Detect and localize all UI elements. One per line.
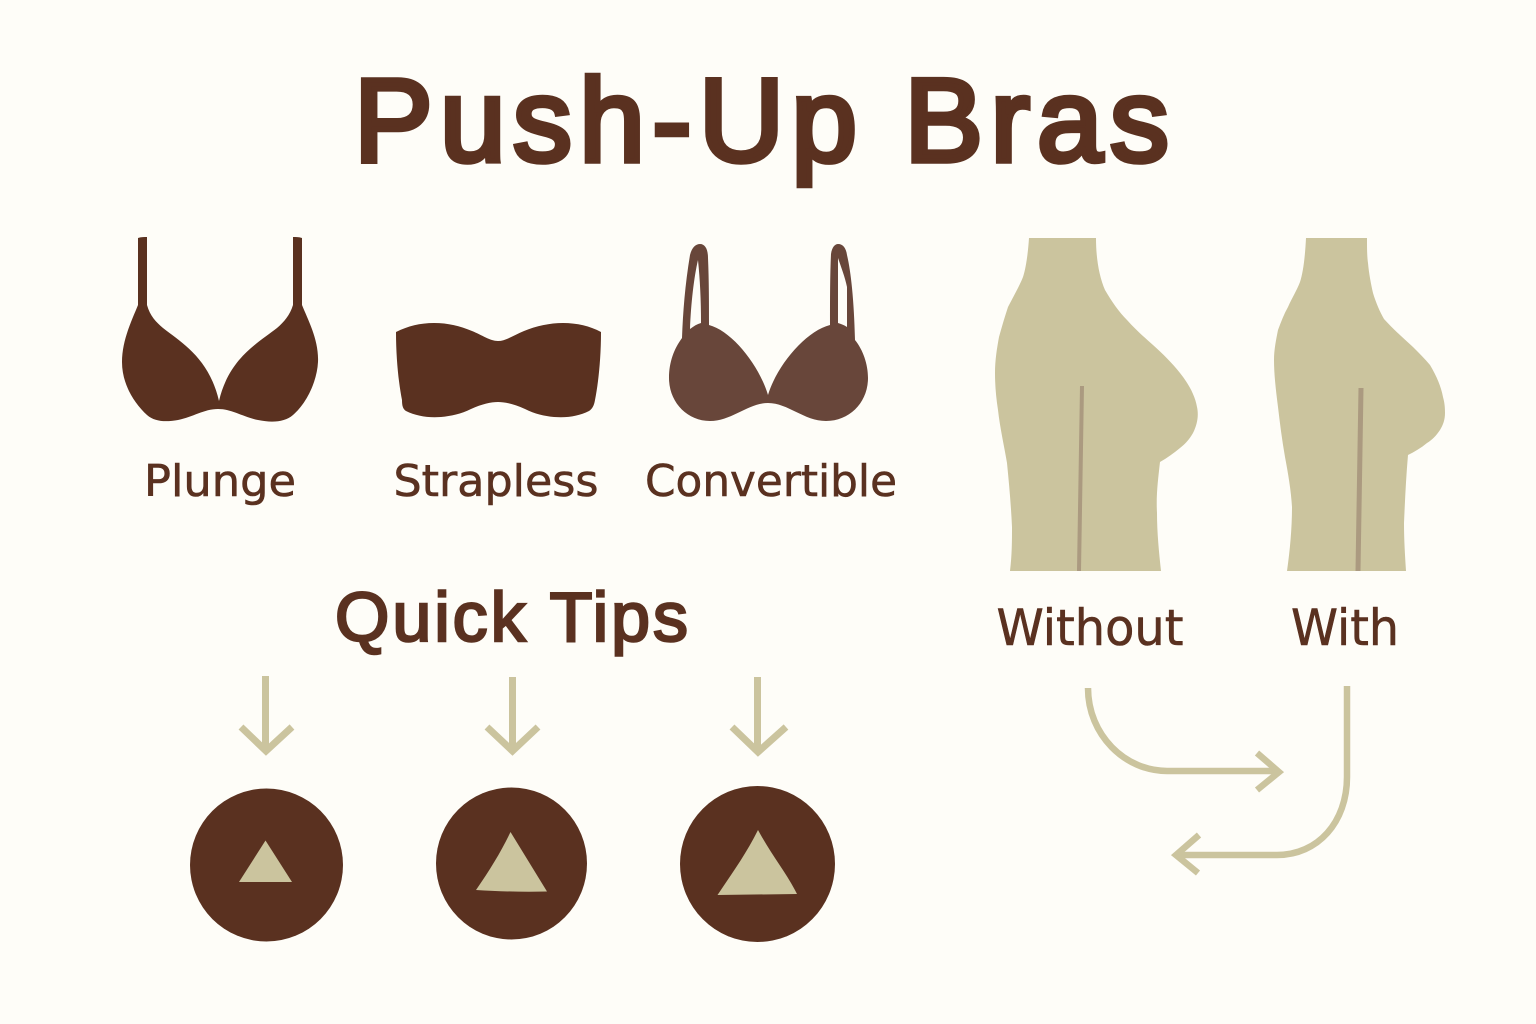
label: plunge: Plunge [144, 456, 296, 507]
icon: convertible bra [669, 244, 868, 421]
panel: tips [190, 676, 835, 942]
seam [1079, 386, 1082, 571]
seam [1358, 388, 1361, 571]
arrow: tip 2 [487, 677, 538, 751]
arrow: tip 1 [241, 676, 292, 751]
panel: comparison [995, 238, 1445, 873]
figure: without [995, 238, 1198, 571]
label: with: With [1291, 599, 1399, 657]
figure: with [1274, 238, 1445, 571]
icon: strapless bra [396, 323, 601, 417]
panel: bra styles [122, 237, 897, 507]
icon: tip 2 badge [436, 788, 587, 940]
label: without: Without [996, 599, 1184, 657]
label: strapless: Strapless [394, 456, 598, 507]
label: convertible: Convertible [645, 456, 897, 507]
arrow: tip 3 [732, 677, 786, 752]
icon: tip 3 badge [680, 786, 835, 942]
arrow: with to without [1176, 686, 1347, 873]
arrow: without to with [1088, 688, 1279, 790]
title: Push-Up Bras [354, 55, 1169, 187]
icon: tip 1 badge [190, 788, 343, 942]
icon: plunge bra [122, 237, 318, 422]
heading: quick tips: Quick Tips [335, 578, 688, 656]
